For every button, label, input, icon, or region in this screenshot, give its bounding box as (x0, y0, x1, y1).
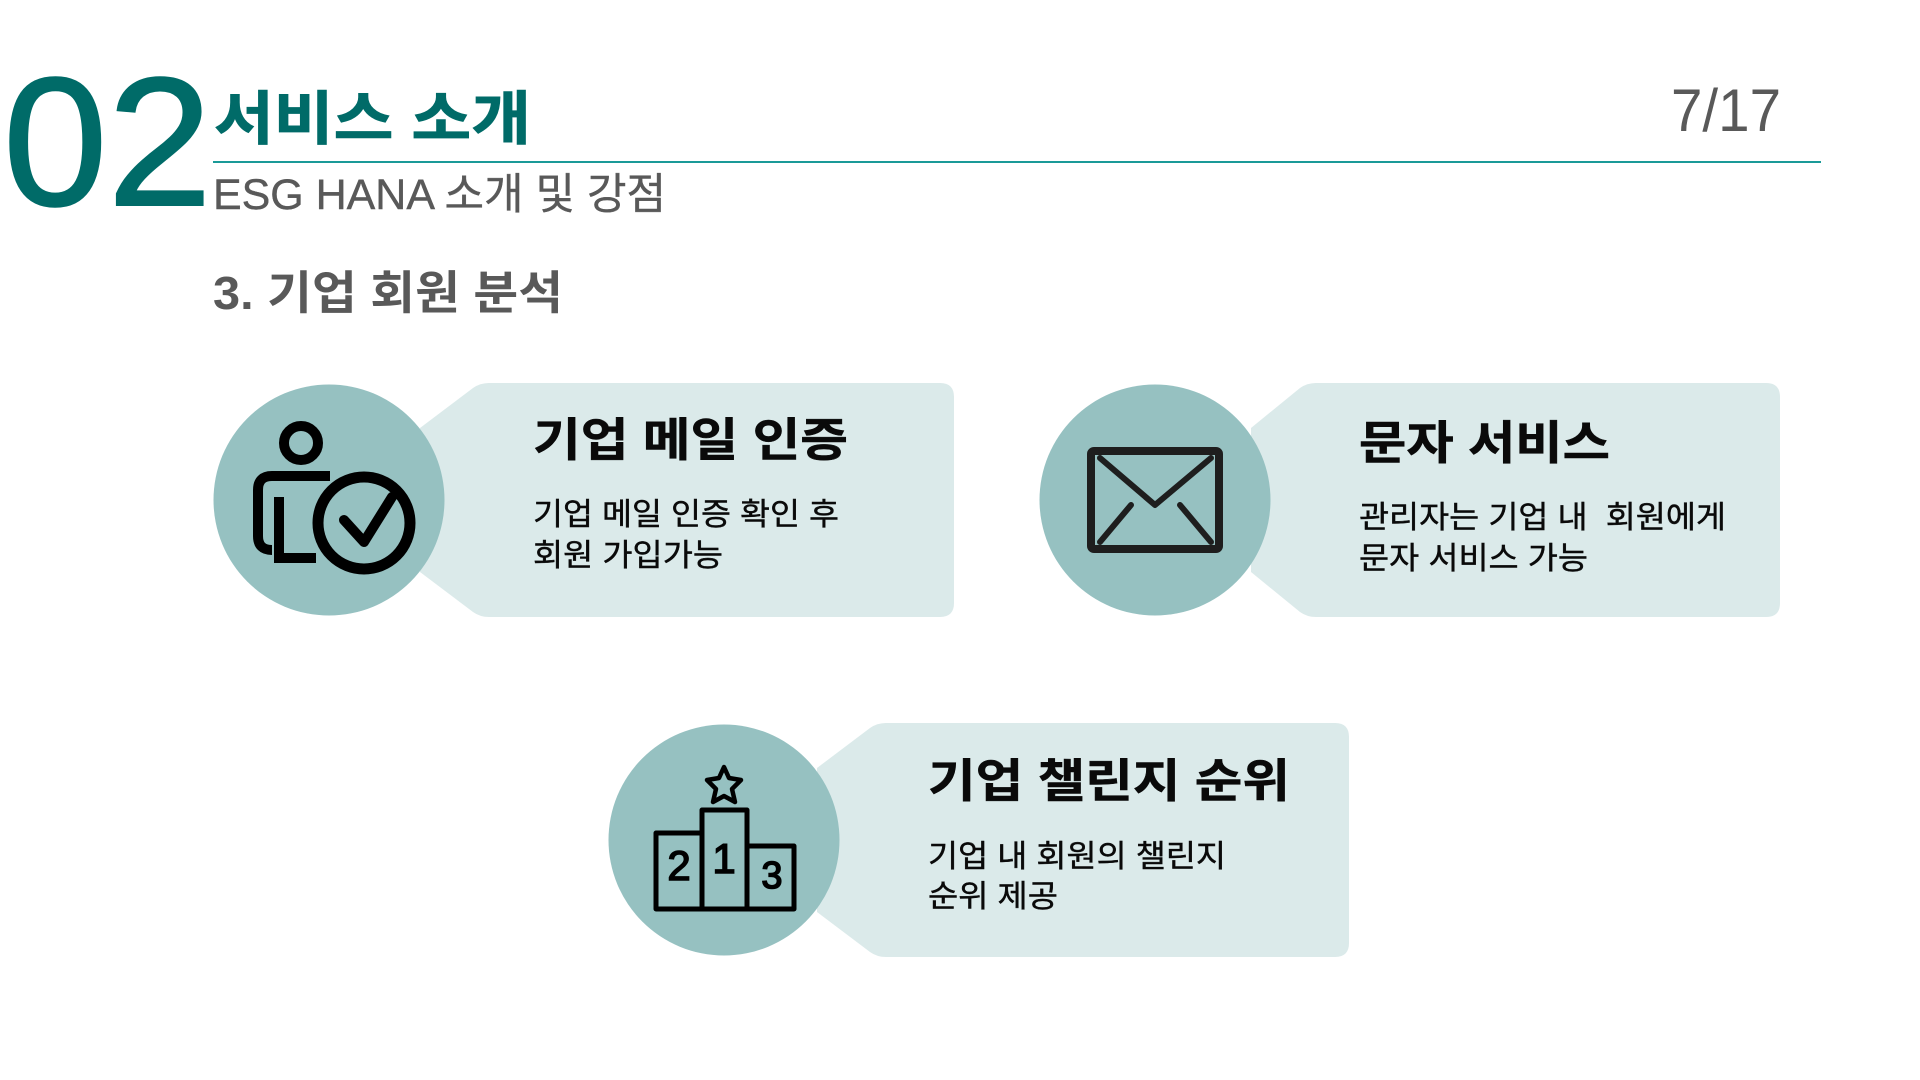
panel: company email verification (214, 383, 954, 617)
card description: 기업 메일 인증 확인 후 (533, 497, 839, 532)
card description: 문자 서비스 가능 (1359, 541, 1588, 576)
card heading: 기업 챌린지 순위 (928, 755, 1290, 807)
panel: text message service (1040, 383, 1780, 617)
icon: person with check mark (258, 426, 410, 569)
subtitle: ESG HANA 소개 및 강점 (213, 171, 666, 219)
card description: 관리자는 기업 내 회원에게 (1359, 500, 1726, 535)
card description: 회원 가입가능 (533, 538, 723, 573)
card background (817, 723, 1349, 957)
card heading: 기업 메일 인증 (533, 414, 848, 466)
panel: company challenge ranking (608, 723, 1349, 957)
header rule (213, 161, 1821, 163)
card background (1251, 383, 1780, 617)
card description (928, 839, 1226, 914)
icon: podium with star: 3 (761, 855, 783, 897)
card description: 순위 제공 (928, 879, 1058, 914)
icon: podium with star (656, 767, 794, 909)
card description: 기업 내 회원의 챌린지 (928, 839, 1226, 874)
card description (533, 497, 839, 573)
circle (214, 384, 444, 616)
icon: envelope (1091, 451, 1219, 549)
card description (1359, 500, 1726, 576)
circle (1040, 384, 1270, 616)
icon: podium with star: 2 (667, 842, 691, 889)
icon: podium with star: 1 (712, 835, 736, 882)
page number: 7/17 (1671, 77, 1781, 144)
title: 서비스 소개 (214, 87, 531, 152)
card heading: 문자 서비스 (1359, 417, 1610, 469)
circle (608, 724, 840, 956)
section number: 02 (3, 39, 212, 244)
section heading: 3. 기업 회원 분석 (213, 267, 563, 319)
card background (420, 383, 954, 617)
